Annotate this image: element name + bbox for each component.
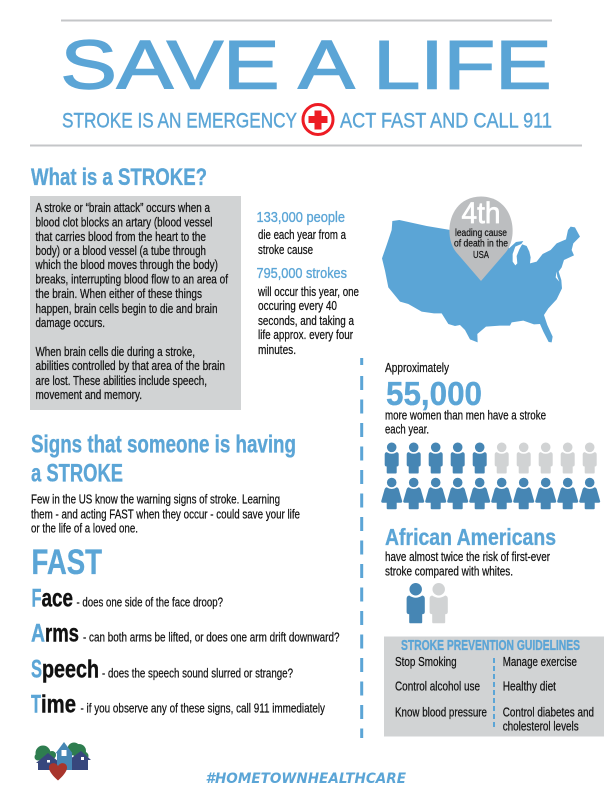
lake michigan xyxy=(513,243,523,265)
stat: African Americans: African Americans xyxy=(385,524,556,550)
text block: signs intro: or the life of a loved one. xyxy=(31,522,138,536)
map: USA with 4th leading cause pin: of death in the xyxy=(454,238,508,250)
icon: red cross xyxy=(303,104,333,134)
stat: 133,000 people: stroke cause xyxy=(258,243,313,257)
chart: women icons row xyxy=(381,478,600,509)
list item: Speech: - does the speech sound slurred or strange? xyxy=(102,666,293,680)
map: USA with 4th leading cause pin: USA xyxy=(473,250,489,261)
panel: stroke definition: the brain. When either of these things xyxy=(36,287,202,301)
panel: stroke prevention guidelines: Manage exercise xyxy=(503,655,577,669)
stat: 55,000 women: 55,000 xyxy=(386,375,482,412)
map: USA with 4th leading cause pin xyxy=(382,196,580,342)
panel: stroke definition: A stroke or “brain attack” occurs when a xyxy=(36,201,210,215)
list item: Arms: A xyxy=(31,620,45,648)
panel: stroke definition xyxy=(30,196,241,410)
list item: Speech: peech xyxy=(42,655,99,683)
stat: African Americans xyxy=(385,524,556,578)
stat: 55,000 women: Approximately xyxy=(385,361,450,375)
text block: signs intro xyxy=(31,493,300,536)
title: SAVE A LIFE xyxy=(60,26,552,104)
subtitle right: ACT FAST AND CALL 911 xyxy=(340,108,552,132)
list item: Face: ace xyxy=(42,585,73,613)
list item: Speech: S xyxy=(31,655,42,683)
panel: stroke prevention guidelines: Healthy diet xyxy=(503,680,556,694)
heading: signs of stroke: Signs that someone is having xyxy=(31,430,296,458)
panel: stroke definition: that carries blood from the heart to the xyxy=(36,230,206,244)
panel: stroke prevention guidelines: Stop Smoking xyxy=(395,655,457,669)
stat: 55,000 women: each year. xyxy=(385,422,429,436)
map: USA with 4th leading cause pin: leading cause xyxy=(455,228,507,239)
stat: 133,000 people: 133,000 people xyxy=(256,209,345,226)
stat: 795,000 strokes: 795,000 strokes xyxy=(256,265,347,282)
panel: stroke prevention guidelines xyxy=(384,636,604,736)
text block: signs intro: them - and acting FAST when they occur - could save your life xyxy=(31,508,300,522)
stat: African Americans: stroke compared with whites. xyxy=(385,564,513,578)
hashtag: #HOMETOWNHEALTHCARE xyxy=(206,771,406,787)
icon: hometown healthcare logo xyxy=(34,742,91,780)
heading: FAST: FAST xyxy=(32,543,102,582)
stat: 795,000 strokes: minutes. xyxy=(258,343,296,357)
panel: stroke definition: blood clot blocks an artary (blood vessel xyxy=(36,215,212,229)
stat: African Americans: have almost twice the risk of first-ever xyxy=(385,550,550,564)
stat: 133,000 people: die each year from a xyxy=(258,228,346,242)
list item: Face: - does one side of the face droop? xyxy=(76,596,223,610)
panel: stroke prevention guidelines: cholesterol levels xyxy=(503,720,579,734)
pin text: 4th xyxy=(462,197,500,230)
panel: stroke definition: movement and memory. xyxy=(36,388,142,402)
heading: what is a stroke: What is a STROKE? xyxy=(31,164,207,191)
list item: Arms: rms xyxy=(45,620,79,648)
chart: men icons row xyxy=(385,442,597,474)
panel: stroke definition: body) or a blood vessel (a tube through xyxy=(36,244,206,258)
stat: 55,000 women: more women than men have a stroke xyxy=(385,408,546,422)
text block: signs intro: Few in the US know the warning signs of stroke. Learning xyxy=(31,493,280,507)
panel: stroke definition: When brain cells die during a stroke, xyxy=(36,345,195,359)
panel: stroke definition: which the blood moves through the body) xyxy=(35,258,218,272)
list item: Face xyxy=(32,585,223,613)
panel: stroke definition: breaks, interrupting blood flow to an area of xyxy=(36,272,228,286)
heading: signs of stroke xyxy=(31,430,296,488)
icon: two people xyxy=(407,583,448,623)
panel: stroke definition: happen, brain cells begin to die and brain xyxy=(36,302,218,316)
list item: Time: T xyxy=(31,691,41,719)
panel: stroke definition: are lost. These abilities include speech, xyxy=(36,374,207,388)
subtitle left: STROKE IS AN EMERGENCY xyxy=(62,108,297,132)
divider: vertical dashed line xyxy=(360,358,363,738)
panel: stroke definition: damage occurs. xyxy=(36,316,105,330)
stat: 795,000 strokes xyxy=(256,265,359,357)
header xyxy=(30,20,582,146)
stat: 133,000 people xyxy=(256,209,346,257)
stat: 55,000 women xyxy=(385,361,546,436)
stat: 795,000 strokes: will occur this year, one xyxy=(257,285,359,299)
map outline xyxy=(382,220,580,342)
stat: 795,000 strokes: seconds, and taking a xyxy=(258,314,354,328)
panel: stroke prevention guidelines: Control alcohol use xyxy=(395,680,480,694)
list item: Time xyxy=(31,691,326,719)
list item: Speech xyxy=(31,655,293,683)
list item: Face: F xyxy=(32,585,42,613)
list item: Time: ime xyxy=(41,691,76,719)
panel: stroke definition: abilities controlled by that area of the brain xyxy=(36,359,225,373)
pin xyxy=(449,196,513,281)
chesapeake bay xyxy=(556,272,559,282)
list item: Time: - if you observe any of these signs, call 911 immediately xyxy=(80,702,326,716)
heading: signs of stroke: a STROKE xyxy=(31,460,123,488)
list item: Arms xyxy=(31,620,340,648)
stat: 795,000 strokes: occuring every 40 xyxy=(258,299,337,313)
stat: 795,000 strokes: life approx. every four xyxy=(258,328,353,342)
panel: stroke prevention guidelines: Know blood pressure xyxy=(395,706,487,720)
list item: Arms: - can both arms be lifted, or does one arm drift downward? xyxy=(83,631,340,645)
